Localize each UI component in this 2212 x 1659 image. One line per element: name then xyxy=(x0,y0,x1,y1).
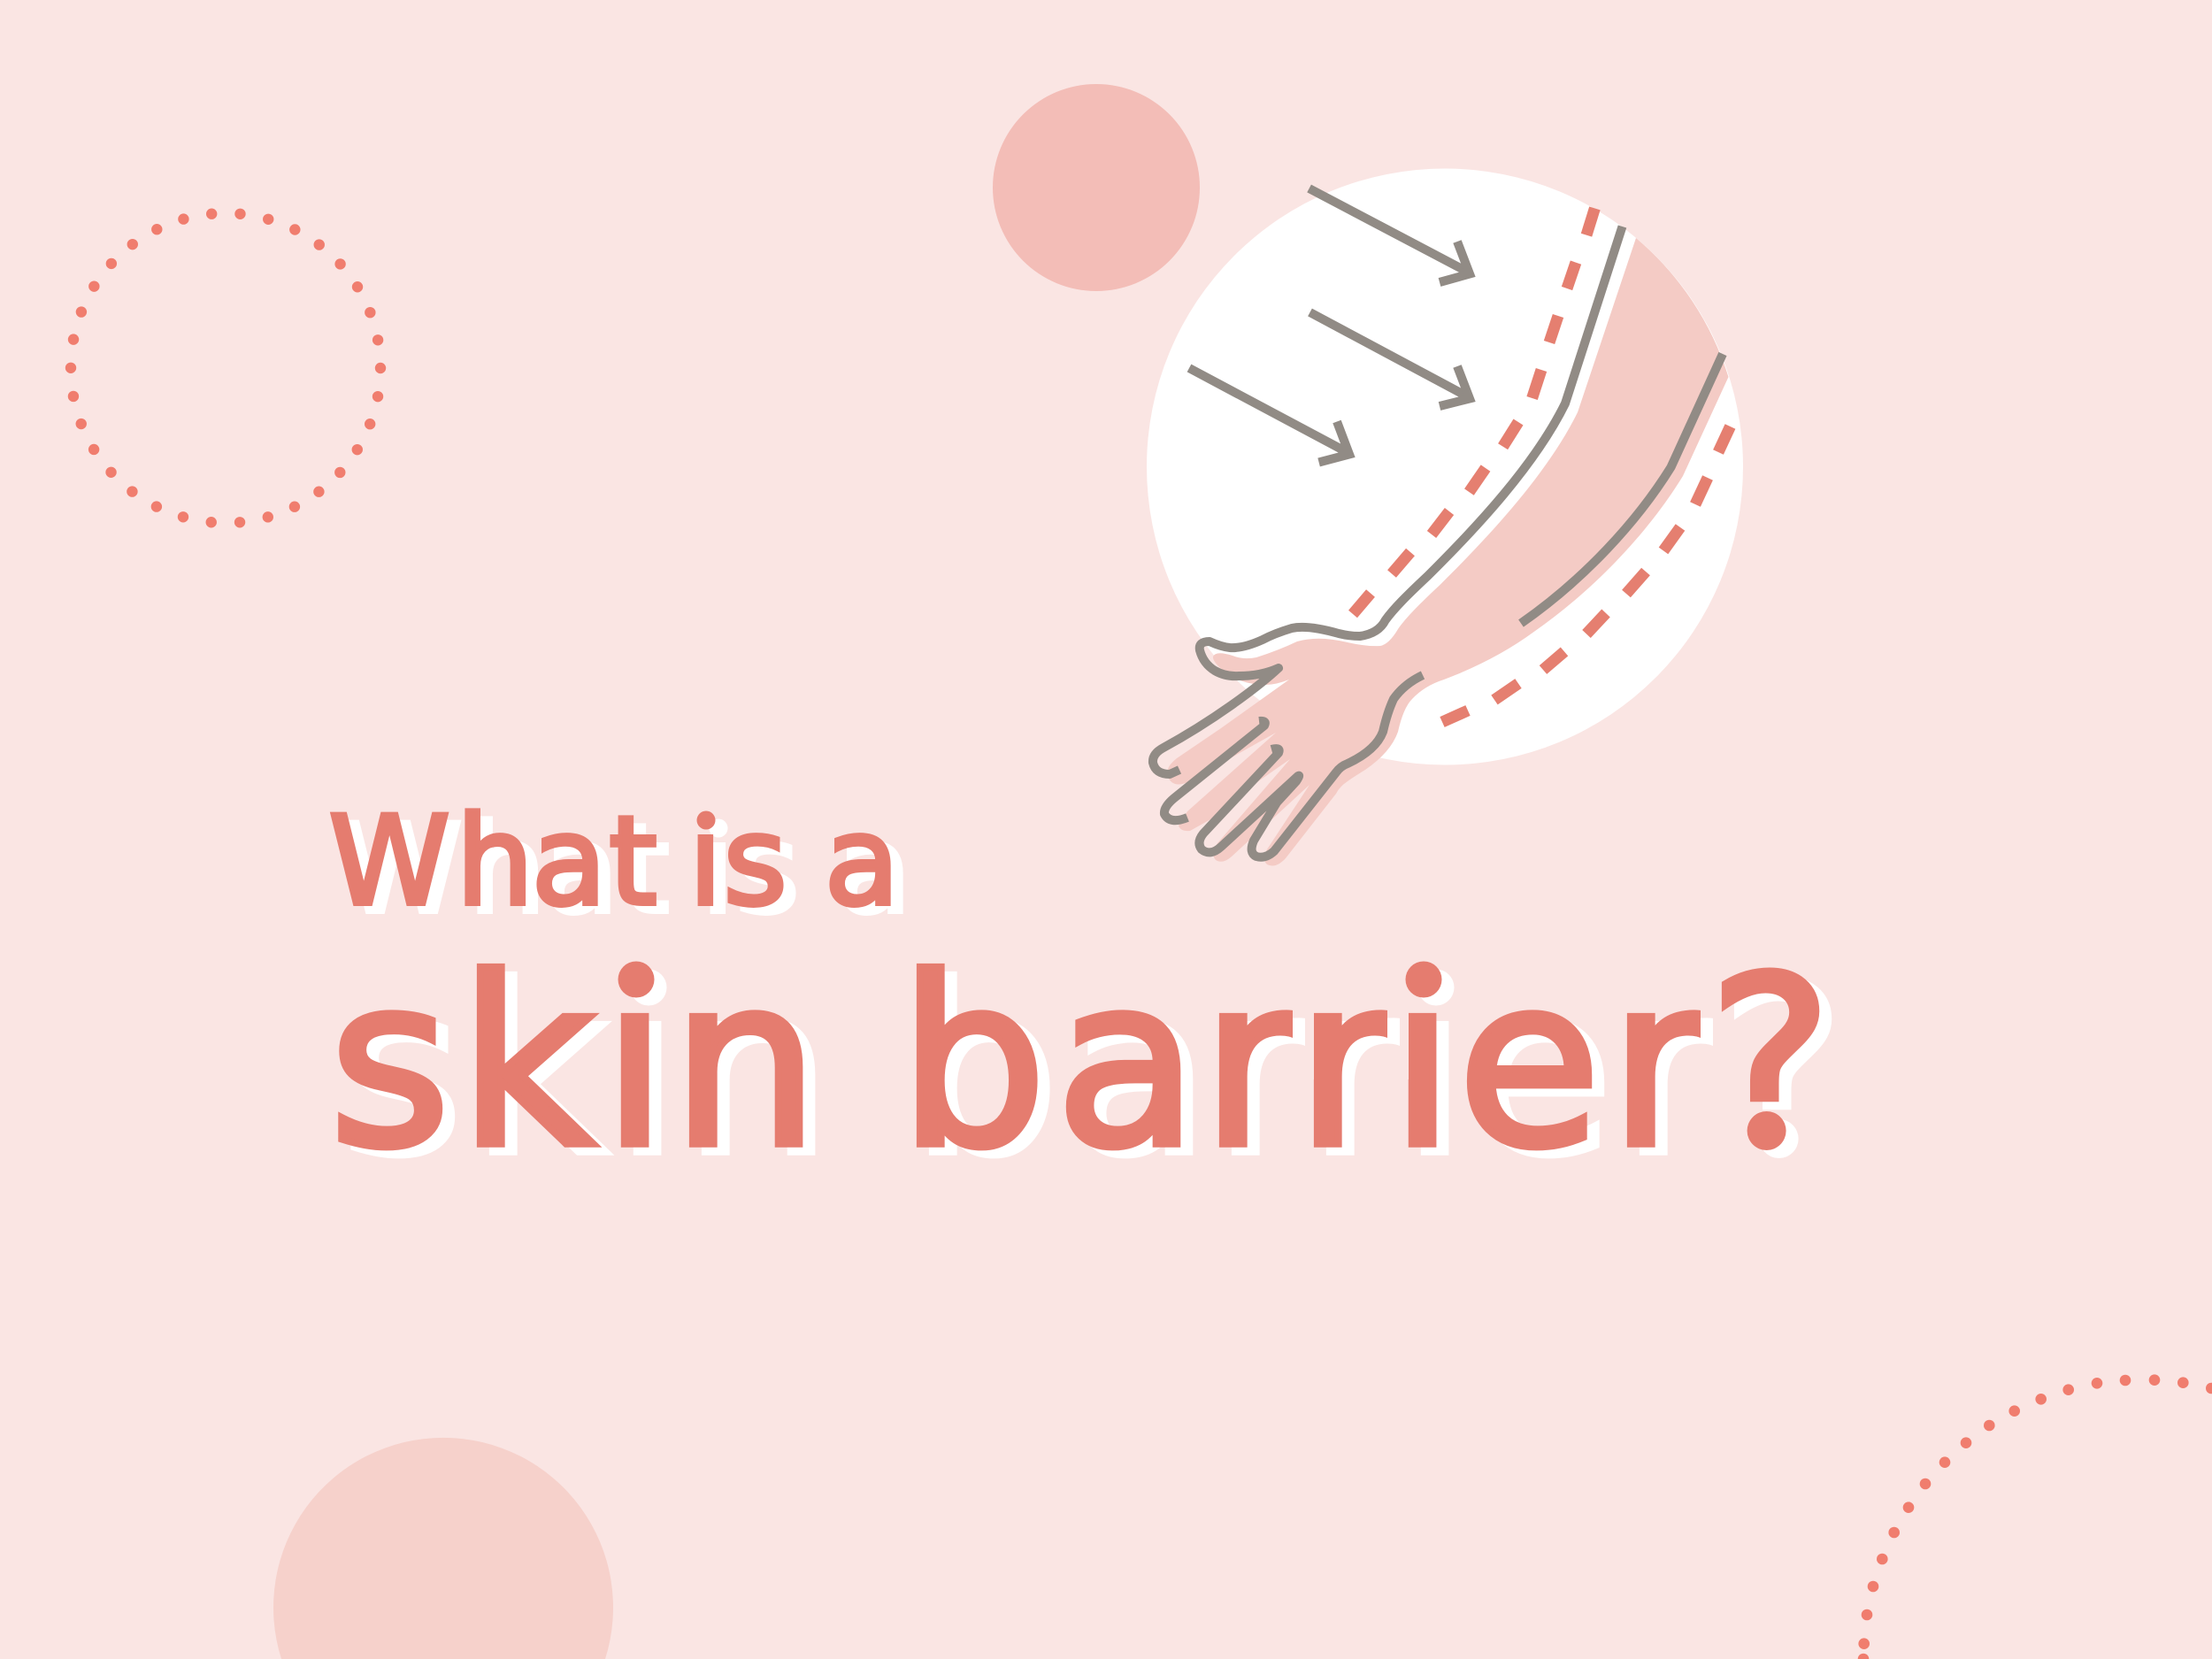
title shadow: skin barrier? xyxy=(342,937,1845,1208)
dashed barrier line: lower xyxy=(1442,426,1731,722)
arm outline: lower edge xyxy=(1521,354,1723,623)
outline: second finger xyxy=(1164,721,1265,820)
illustration: arm and hand xyxy=(1153,227,1729,865)
title shadow: What is a xyxy=(341,798,912,941)
title line 1 xyxy=(329,808,891,908)
arm fill xyxy=(1167,238,1729,865)
arm outline: upper edge and thumb xyxy=(1153,227,1623,774)
dashed barrier line: upper xyxy=(1353,208,1594,614)
title line 2: skin barrier? xyxy=(329,929,1832,1200)
title xyxy=(329,808,1832,1159)
title shadow xyxy=(349,816,1832,1159)
arrow: top xyxy=(1310,188,1471,282)
dotted ring: top left xyxy=(71,213,380,523)
arrow: left xyxy=(1189,368,1350,462)
arrow: middle xyxy=(1310,312,1471,406)
white circle behind arm xyxy=(1147,168,1743,764)
decorative circle: bottom xyxy=(273,1438,613,1659)
title line 2 xyxy=(338,961,1819,1150)
dotted arc: bottom right xyxy=(1858,1374,2212,1659)
outline: remaining fingers and wrist xyxy=(1199,675,1423,857)
title line 1: What is a xyxy=(328,789,900,933)
decorative circle: top xyxy=(993,84,1200,291)
